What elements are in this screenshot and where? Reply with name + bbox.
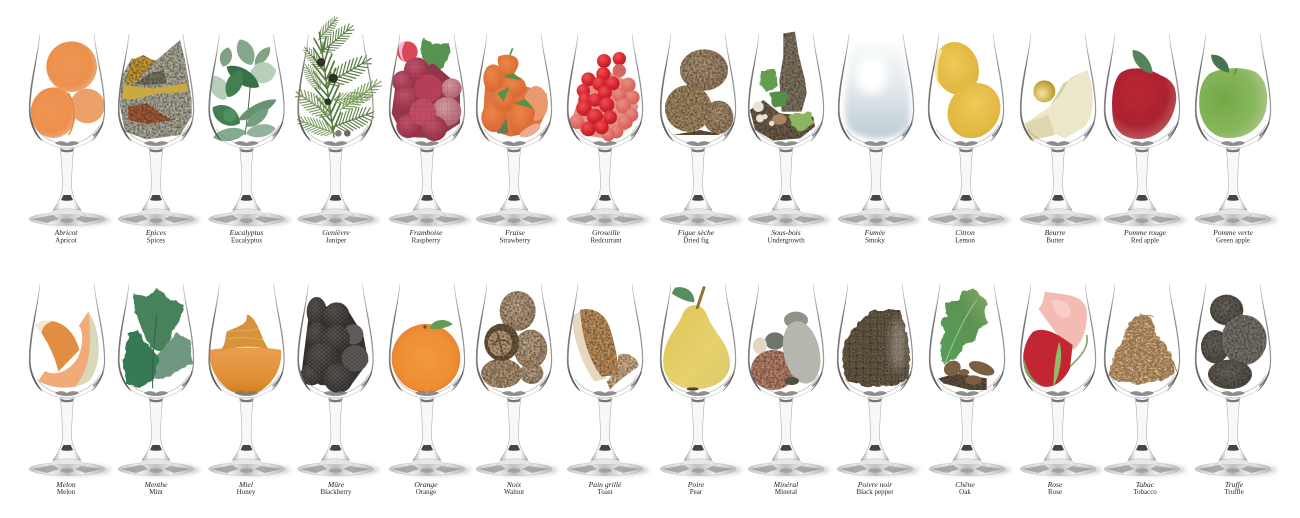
- glass: Citron: [928, 34, 1011, 244]
- label: Chêne: Chêne: [955, 480, 975, 489]
- label: Minéral: [773, 480, 798, 496]
- label: Groseille: Redcurrant: [590, 236, 622, 244]
- glass: Pain grillé: [567, 284, 649, 496]
- label: Melon: Melon: [57, 488, 76, 496]
- blackberries: [301, 297, 368, 393]
- spices: [120, 40, 192, 139]
- label: Menthe: Menthe: [144, 480, 168, 489]
- pear: [663, 287, 730, 391]
- label: Sous-bois: [767, 228, 805, 244]
- label: Pomme rouge: Pomme rouge: [1123, 228, 1167, 237]
- glass: Orange: [389, 284, 471, 496]
- label: Épices: [145, 228, 166, 244]
- label: Miel: [237, 480, 256, 496]
- label: Groseille: Groseille: [592, 228, 621, 237]
- label: Truffe: [1224, 480, 1244, 496]
- bark, moss and ground: [750, 32, 815, 141]
- lemons: [928, 37, 1011, 149]
- raspberries and leaf: [392, 37, 462, 141]
- label: Orange: [414, 480, 438, 496]
- tobacco: [1108, 315, 1177, 383]
- orange: [392, 320, 460, 393]
- label: Figue sèche: Figue sèche: [677, 228, 715, 237]
- label: Citron: Citron: [955, 228, 975, 237]
- roses: [1023, 292, 1087, 387]
- label: Poire: Pear: [690, 488, 703, 496]
- apricots: [31, 41, 105, 138]
- label: Fumée: Fumée: [864, 228, 886, 237]
- label: Fumée: Smoky: [865, 236, 885, 244]
- glass: Épices: [118, 34, 200, 244]
- label: Eucalyptus: [229, 228, 263, 244]
- label: Noix: [504, 480, 524, 496]
- honey: [209, 315, 281, 395]
- oak leaf and acorns: [938, 288, 996, 390]
- label: Chêne: Oak: [959, 488, 971, 496]
- label: Poire: [687, 480, 705, 496]
- label: Poire: Poire: [687, 480, 705, 489]
- label: Melon: [55, 480, 76, 496]
- label: Menthe: Mint: [149, 488, 163, 496]
- label: Framboise: Raspberry: [412, 236, 441, 244]
- label: Épices: Spices: [147, 236, 165, 244]
- red apple: [1112, 50, 1176, 139]
- label: Figue sèche: Dried fig: [683, 236, 709, 244]
- truffles: [1201, 295, 1267, 389]
- label: Minéral: Minéral: [773, 480, 798, 489]
- label: Miel: Honey: [237, 488, 256, 496]
- label: Citron: Lemon: [955, 236, 975, 244]
- glass: Figue sèche: [660, 34, 742, 244]
- label: Orange: Orange: [414, 480, 438, 489]
- label: Orange: Orange: [416, 488, 436, 496]
- label: Menthe: [144, 480, 168, 496]
- label: Abricot: Apricot: [55, 236, 77, 244]
- glass: Genièvre: [291, 14, 385, 244]
- toast slices: [573, 309, 639, 390]
- label: Citron: [955, 228, 975, 244]
- label: Rose: [1047, 480, 1063, 496]
- mint leaves: [123, 289, 193, 388]
- label: Groseille: [590, 228, 622, 244]
- label: Mûre: [320, 480, 352, 496]
- label: Rose: Rose: [1047, 480, 1063, 489]
- label: Noix: Walnut: [504, 488, 524, 496]
- walnuts: [481, 291, 547, 388]
- label: Pain grillé: Toast: [597, 488, 613, 496]
- label: Pomme verte: [1212, 228, 1254, 244]
- label: Pomme rouge: [1123, 228, 1167, 244]
- label: Sous-bois: Undergrowth: [767, 236, 805, 244]
- label: Pomme verte: Green apple: [1216, 236, 1250, 244]
- label: Mûre: Mûre: [327, 480, 345, 489]
- glass: Fumée: [838, 34, 920, 244]
- glass: Pomme rouge: [1104, 34, 1186, 244]
- melon slices: [35, 312, 99, 388]
- label: Mûre: Blackberry: [320, 488, 352, 496]
- label: Melon: Melon: [55, 480, 76, 489]
- glass: Melon: [29, 284, 111, 496]
- eucalyptus leaves: [206, 36, 279, 144]
- redcurrants: [569, 52, 640, 141]
- label: Genièvre: [322, 228, 350, 244]
- smoke: [845, 40, 910, 139]
- glass: Groseille: [567, 34, 649, 244]
- green apple: [1199, 55, 1267, 138]
- label: Tabac: Tobacco: [1133, 488, 1157, 496]
- label: Poivre noir: [856, 480, 894, 496]
- label: Poivre noir: Black pepper: [856, 488, 894, 496]
- label: Chêne: [955, 480, 975, 496]
- glass: Truffe: [1195, 284, 1277, 496]
- black pepper: [843, 310, 910, 387]
- glass: Rose: [1020, 284, 1102, 496]
- label: Eucalyptus: Eucalyptus: [231, 236, 262, 244]
- label: Pomme verte: Pomme verte: [1212, 228, 1254, 237]
- label: Abricot: [54, 228, 78, 244]
- butter and curl: [1025, 70, 1093, 141]
- label: Rose: Rose: [1048, 488, 1062, 496]
- glass: Miel: [208, 284, 290, 496]
- label: Eucalyptus: Eucalyptus: [229, 228, 263, 237]
- label: Tabac: [1133, 480, 1157, 496]
- strawberries: [481, 48, 548, 137]
- label: Fraise: [499, 228, 531, 244]
- glass: Chêne: [929, 284, 1011, 496]
- label: Poivre noir: Poivre noir: [857, 480, 892, 489]
- dried figs: [665, 49, 733, 135]
- label: Truffe: Truffle: [1224, 488, 1244, 496]
- label: Pain grillé: Pain grillé: [588, 480, 622, 489]
- label: Beurre: Butter: [1046, 236, 1064, 244]
- label: Beurre: [1045, 228, 1066, 244]
- glass: Poire: [660, 284, 742, 496]
- label: Tabac: Tabac: [1136, 480, 1155, 489]
- glass: Poivre noir: [837, 284, 919, 496]
- label: Genièvre: Genièvre: [322, 228, 350, 237]
- glass: Fraise: [476, 34, 558, 244]
- label: Fumée: [864, 228, 886, 244]
- juniper sprigs: [291, 14, 385, 140]
- label: Truffe: Truffe: [1225, 480, 1244, 489]
- glass: Abricot: [29, 34, 111, 244]
- label: Fraise: Fraise: [504, 228, 526, 237]
- glass: Eucalyptus: [206, 34, 290, 244]
- label: Genièvre: Juniper: [326, 236, 347, 244]
- glass: Mûre: [298, 284, 380, 496]
- stones: [751, 312, 826, 390]
- glass: Beurre: [1020, 34, 1102, 244]
- glass: Pomme verte: [1195, 34, 1277, 244]
- label: Noix: Noix: [506, 480, 522, 489]
- glass: Framboise: [389, 34, 471, 244]
- label: Minéral: Mineral: [775, 488, 797, 496]
- label: Sous-bois: Sous-bois: [771, 228, 801, 237]
- label: Fraise: Strawberry: [499, 236, 531, 244]
- glass: Menthe: [118, 284, 200, 496]
- glass: Minéral: [748, 284, 830, 496]
- label: Figue sèche: [677, 228, 715, 244]
- glass: Sous-bois: [748, 32, 830, 245]
- label: Abricot: Abricot: [54, 228, 78, 237]
- label: Framboise: [409, 228, 443, 244]
- label: Pain grillé: [588, 480, 622, 496]
- glass: Noix: [476, 284, 558, 496]
- label: Miel: Miel: [238, 480, 253, 489]
- label: Pomme rouge: Red apple: [1131, 236, 1159, 244]
- label: Épices: Epices: [145, 228, 166, 237]
- label: Beurre: Beurre: [1045, 228, 1066, 237]
- label: Framboise: Framboise: [409, 228, 443, 237]
- glass: Tabac: [1104, 284, 1186, 496]
